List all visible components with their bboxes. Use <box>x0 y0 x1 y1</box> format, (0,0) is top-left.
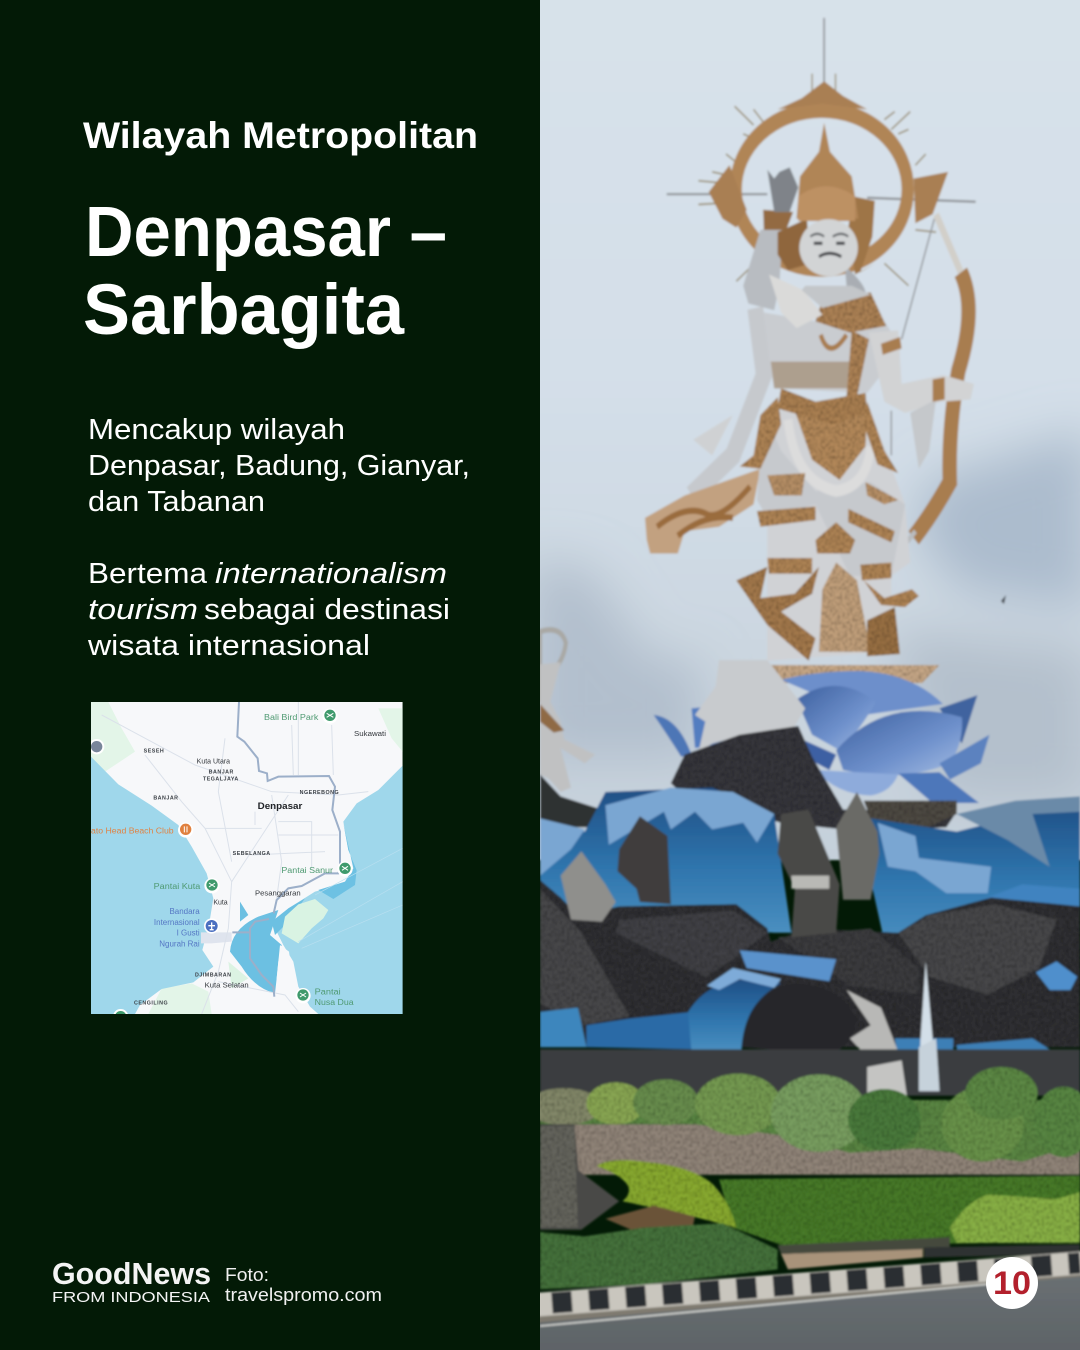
map labels: NGEREBONG <box>300 790 339 796</box>
white monkey figure <box>695 660 805 752</box>
yellow-green bush <box>597 1160 736 1228</box>
text block: coverage area: Mencakup wilayah <box>88 414 345 446</box>
map pins <box>89 708 353 1024</box>
photo credit: Foto: <box>225 1265 269 1285</box>
heading: Wilayah Metropolitan: Wilayah Metropolitan <box>83 115 478 156</box>
lower bushes <box>540 1223 778 1289</box>
title: Denpasar – Sarbagita <box>83 193 447 350</box>
photo credit: travelspromo.com <box>225 1285 382 1305</box>
map: Denpasar area: Sukawati <box>354 731 386 738</box>
text block: coverage area: dan Tabanan <box>88 486 265 518</box>
arm holding bow <box>869 330 974 469</box>
map: Denpasar area: I Gusti <box>177 929 200 938</box>
map: Denpasar area: Pantai <box>315 987 341 996</box>
text block: theme: internationalism <box>215 558 447 590</box>
map: Denpasar area: Bandara <box>169 907 200 916</box>
map labels: SESEH <box>144 749 164 755</box>
title: Denpasar – Sarbagita: Sarbagita <box>83 271 405 350</box>
stone block and rock <box>540 1124 619 1230</box>
sky <box>520 0 1080 860</box>
page number badge <box>986 1257 1038 1309</box>
map: Denpasar area: Kuta Utara <box>197 758 230 765</box>
statue figure <box>540 18 976 700</box>
figures <box>559 792 934 1052</box>
map: Denpasar area: ato Head Beach Club <box>91 826 174 835</box>
map: Denpasar area: Pesanggaran <box>255 890 301 897</box>
map labels: CENGILING <box>134 1001 168 1007</box>
mulch <box>606 1204 696 1231</box>
dark boulder <box>742 985 842 1050</box>
sea <box>91 757 213 1014</box>
logo: GoodNews from Indonesia: FROM INDONESIA <box>52 1290 210 1306</box>
bushes <box>526 1067 1080 1162</box>
logo: GoodNews from Indonesia: GoodNews <box>52 1256 211 1291</box>
title: Denpasar – Sarbagita: Denpasar – <box>85 193 447 272</box>
map labels: SEBELANGA <box>233 851 271 857</box>
photo credit <box>225 1265 382 1305</box>
torso <box>764 292 902 424</box>
rock peak <box>671 726 957 832</box>
lower waves <box>540 950 1077 1060</box>
map labels: BANJAR <box>153 795 179 801</box>
photo: monument statue <box>520 0 1080 1350</box>
map: Denpasar area: Kuta <box>213 900 228 907</box>
crown and head <box>778 123 876 308</box>
text block: coverage area: Denpasar, Badung, Gianyar, <box>88 450 470 482</box>
map: Denpasar area: Kuta Selatan <box>205 983 249 990</box>
map: Denpasar area: Ngurah Rai <box>159 939 200 948</box>
text block: theme: wisata internasional <box>87 630 370 662</box>
map: Denpasar area: Pantai Kuta <box>154 882 201 891</box>
text block: theme: sebagai destinasi <box>204 594 450 626</box>
flying scarf <box>645 308 764 554</box>
halo and spikes <box>667 18 976 286</box>
map: Denpasar area: Bali Bird Park <box>264 713 318 722</box>
left figure <box>540 662 602 827</box>
page number badge: 10 <box>993 1265 1031 1301</box>
green land patches <box>91 702 135 772</box>
left mini figure <box>540 630 566 700</box>
text block: theme: tourism <box>88 594 198 626</box>
text block: theme: Bertema <box>88 558 208 590</box>
map: Denpasar area: Pantai Sanur <box>281 866 333 875</box>
monument base <box>540 660 1080 1096</box>
bow <box>891 214 969 562</box>
highways <box>232 702 340 997</box>
map labels: TEGALJAYA <box>203 776 239 782</box>
map labels <box>134 749 339 1007</box>
logo: GoodNews from Indonesia <box>52 1256 211 1306</box>
map: Denpasar area <box>89 702 403 1024</box>
panel: dark green text panel <box>0 0 540 1350</box>
big rocks <box>540 880 1080 1047</box>
garden <box>526 1067 1080 1289</box>
text block: coverage area <box>88 414 470 518</box>
curb and road <box>520 1250 1080 1350</box>
waves <box>540 788 1080 942</box>
bird <box>1001 595 1006 604</box>
lotus <box>654 671 989 803</box>
raised arm <box>743 167 822 328</box>
sand path <box>781 1248 923 1269</box>
wall <box>540 1038 1080 1096</box>
map labels: BANJAR <box>209 769 234 775</box>
stone wall <box>574 1124 1080 1175</box>
map labels: DJIMBARAN <box>195 972 231 978</box>
hedge <box>719 1176 1080 1247</box>
map: Denpasar area: Denpasar <box>258 801 303 811</box>
minor roads <box>102 702 403 1014</box>
text block: theme <box>87 558 450 662</box>
map: Denpasar area: Internasional <box>154 918 200 927</box>
right plants <box>950 1192 1080 1243</box>
map: Denpasar area: Nusa Dua <box>315 998 354 1007</box>
legs and robe <box>736 397 940 683</box>
